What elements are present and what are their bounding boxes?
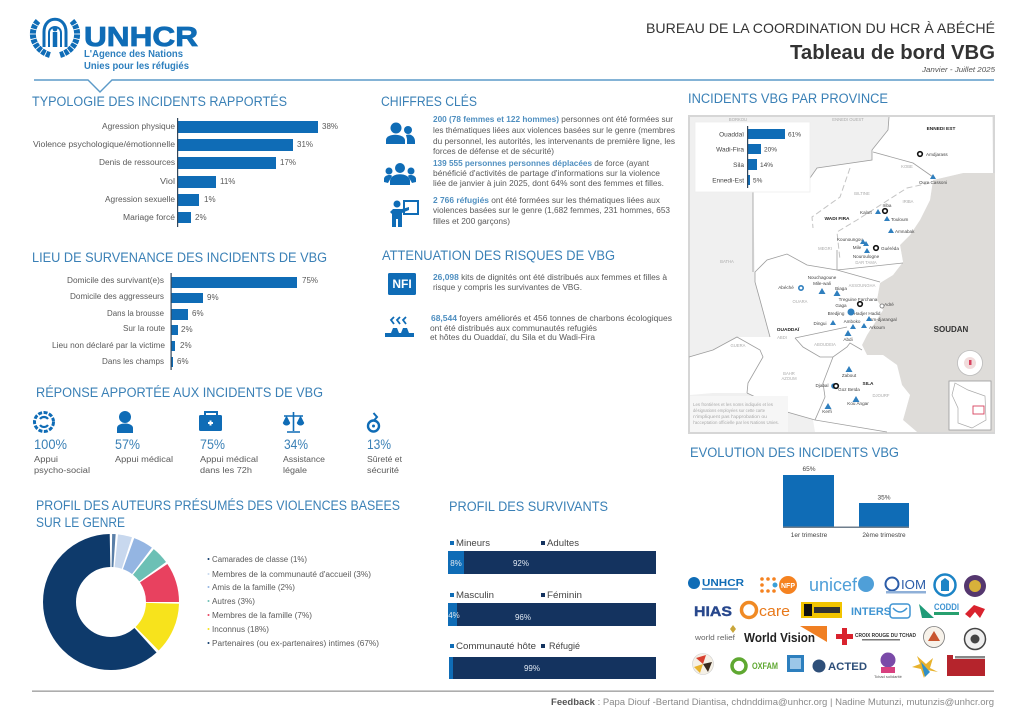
donut legend: Camarades de classe (1%) xyxy=(212,555,307,564)
map labels xyxy=(720,117,969,414)
logo tagline line 2: Unies pour les réfugiés xyxy=(84,61,189,72)
column chart: 35% xyxy=(877,494,891,502)
logo wordmark: UNHCR xyxy=(84,21,198,52)
donut legend xyxy=(208,555,379,648)
map note xyxy=(690,396,788,432)
map labels: Zabout xyxy=(842,373,857,378)
bar chart: Lieu non déclaré par la victime xyxy=(52,341,166,350)
icon: safety xyxy=(368,413,379,432)
logo row 2: HIAS xyxy=(694,603,732,619)
text: formations xyxy=(433,115,675,156)
heading: EVOLUTION DES INCIDENTS VBG xyxy=(690,445,899,460)
map labels: ENNEDI EST xyxy=(927,126,955,132)
bar chart: 17% xyxy=(280,158,296,167)
item: appui medical xyxy=(115,411,173,464)
map note: désignations employées sur cette carte xyxy=(693,408,766,413)
text: foyers ameliores: et hôtes du Ouaddaï, du Sila et du Wadi-Fira xyxy=(430,333,596,342)
logo row 1: unicef xyxy=(809,575,858,595)
stacked bar: sexe: 4% xyxy=(448,611,460,620)
stacked bar: statut: Réfugié xyxy=(549,641,580,651)
icon: psycho-social ring xyxy=(34,412,54,432)
panel: chiffres cles xyxy=(381,94,675,227)
text: kits de dignite xyxy=(433,273,668,292)
item: surete et securite: 13% xyxy=(367,436,391,452)
map labels: BILTINE xyxy=(854,191,870,196)
logo row 2: care xyxy=(759,603,790,620)
panel: reponse apportee xyxy=(34,385,403,475)
panel: evolution des incidents xyxy=(690,445,909,539)
logo row 4 xyxy=(692,652,985,679)
logo row 3: CROIX ROUGE DU TCHAD xyxy=(855,633,916,639)
panel: lieu de survenance xyxy=(32,250,327,370)
province bar inset: Sila xyxy=(733,162,744,169)
bar chart: 6% xyxy=(177,357,189,366)
stacked bar: age xyxy=(448,538,656,574)
heading: LIEU DE SURVENANCE DES INCIDENTS DE VBG xyxy=(32,250,327,265)
header rule with notch xyxy=(34,80,994,92)
map labels: Kerfi xyxy=(822,409,832,414)
logo row 4: Tchad solidarité xyxy=(874,674,903,679)
donut legend: Autres (3%) xyxy=(212,597,255,606)
stacked bar: sexe: Masculin xyxy=(456,590,494,600)
column chart: 65% xyxy=(802,466,816,473)
text: foyers ameliores: 68,544 foyers améliorés et 456 tonnes de charbons écologiques xyxy=(431,314,672,323)
map labels: BATHA xyxy=(720,259,734,264)
map markers: camps xyxy=(818,174,936,409)
province bar inset: 61% xyxy=(788,132,801,138)
map labels: Gaga xyxy=(835,303,847,308)
map labels: KOBE xyxy=(901,164,913,169)
map labels: Am-djarangal xyxy=(869,317,897,322)
logo row 1: NFP xyxy=(781,583,795,590)
heading: ATTENUATION DES RISQUES DE VBG xyxy=(382,248,615,263)
province bar inset xyxy=(695,122,810,192)
icon: wreath emblem xyxy=(33,19,77,55)
map labels: BORKOU xyxy=(729,117,747,122)
panel: incidents par province xyxy=(688,91,995,433)
text: formations: 200 (78 femmes et 122 hommes) personnes ont été formées sur xyxy=(433,115,673,124)
logo row 1: UNHCR xyxy=(702,578,745,589)
text: personnes deplacees xyxy=(433,159,664,188)
office name: BUREAU DE LA COORDINATION DU HCR À ABÉCHÉ xyxy=(646,20,995,36)
heading: RÉPONSE APPORTÉE AUX INCIDENTS DE VBG xyxy=(36,385,323,400)
item: surete et securite: Sûreté et xyxy=(367,455,403,464)
bar chart xyxy=(33,118,338,227)
bar chart: Agression sexuelle xyxy=(105,195,176,204)
item: appui medical 72h xyxy=(199,412,258,475)
province bar inset: 5% xyxy=(753,178,763,184)
heading: PROFIL DES SURVIVANTS xyxy=(449,499,608,514)
map labels: Hadjer Hadid xyxy=(854,311,881,316)
donut legend: Membres de la communauté d'accueil (3%) xyxy=(212,570,371,579)
donut chart xyxy=(60,550,162,654)
stacked bar: age: 8% xyxy=(450,559,462,568)
map labels: ASSOUNGHA xyxy=(849,283,876,288)
map labels: Kou Angar xyxy=(847,401,869,406)
bar chart: 1% xyxy=(204,195,216,204)
map labels: Adré xyxy=(884,302,894,307)
map note: Les frontières et les noms indiqués et les xyxy=(693,402,773,407)
map labels: Abéché xyxy=(778,285,794,290)
partner logos xyxy=(688,574,986,679)
map labels: AZOUM xyxy=(781,376,797,381)
icon: presenter xyxy=(390,200,418,227)
bar chart: Denis de ressources xyxy=(99,158,175,167)
item: appui medical 72h: Appui médical xyxy=(200,455,258,464)
stacked bar: sexe: Féminin xyxy=(547,590,582,600)
map labels: Bredjing xyxy=(828,311,845,316)
icon: NFI box xyxy=(388,273,416,295)
date: Janvier - Juillet 2025 xyxy=(921,67,995,74)
text: refugies formes: violences basées sur le genre (1,682 femmes, 231 hommes, 653 xyxy=(433,206,671,215)
text: personnes deplacees: bénéficié d'activités de partage d'informations sur la violence xyxy=(433,169,661,178)
bar chart xyxy=(52,273,318,370)
map labels: WADI FIRA xyxy=(824,216,850,222)
stacked bar: age: Mineurs xyxy=(456,538,491,548)
bar chart: Domicile des aggresseurs xyxy=(70,292,164,301)
map note: l'acceptation officielle par les Nations Unies. xyxy=(693,420,779,425)
map labels: Amboko xyxy=(844,319,861,324)
logo row 2: INTERS xyxy=(851,606,891,618)
map labels: Guéréda xyxy=(881,246,899,251)
stacked bar: statut: 99% xyxy=(524,664,540,673)
text: formations: du personnel, les autorités, les intervenants de première ligne, les xyxy=(433,137,675,146)
bar chart: 2% xyxy=(180,341,192,350)
map labels: Mile xyxy=(853,245,862,250)
map labels: Arkoum xyxy=(869,325,885,330)
icon: scales xyxy=(283,412,304,432)
map labels: Kalaït xyxy=(860,210,872,215)
map labels: IRIBA xyxy=(903,199,914,204)
map labels: ENNEDI OUEST xyxy=(832,117,864,122)
logo row 1: IOM xyxy=(901,577,926,592)
stacked bar: age: Adultes xyxy=(547,538,580,548)
map labels: Dingui xyxy=(813,321,827,326)
map labels: Amnabak xyxy=(895,229,915,234)
map labels: ABDI xyxy=(777,335,787,340)
logo row 4: ACTED xyxy=(828,661,867,673)
province bar inset: 14% xyxy=(760,162,773,169)
heading xyxy=(36,498,400,530)
map labels: Nouroulogne xyxy=(853,254,880,259)
text: personnes deplacees: liée de janvier à juin 2025, dont 64% sont des femmes et filles. xyxy=(433,179,664,188)
map labels: Iriba xyxy=(883,203,892,208)
item: surete et securite xyxy=(367,413,403,475)
footer rule xyxy=(32,690,994,692)
stacked bar: statut: Communauté hôte xyxy=(456,641,536,651)
stacked bar: sexe xyxy=(448,590,656,626)
bar chart: 38% xyxy=(322,122,338,131)
bar chart: Agression physique xyxy=(102,122,176,131)
item: appui psycho-social: Appui xyxy=(34,455,58,464)
map labels: DAR TAMA xyxy=(855,260,877,265)
province bar inset: Ouaddaï xyxy=(719,132,744,138)
column chart: 2ème trimestre xyxy=(862,532,906,539)
map labels: ABOUDEIA xyxy=(814,342,836,347)
text: refugies formes xyxy=(433,196,671,226)
item: assistance legale xyxy=(283,412,326,475)
map labels: Amdjarass xyxy=(926,152,948,157)
map labels: OUARA xyxy=(793,299,808,304)
item: appui medical 72h: 75% xyxy=(200,436,225,452)
map labels: OUADDAÏ xyxy=(777,326,800,333)
column chart xyxy=(783,466,909,539)
icon: doctor xyxy=(117,411,133,433)
item: assistance legale: Assistance xyxy=(283,455,326,464)
item: surete et securite: sécurité xyxy=(367,466,400,475)
UNHCR logo xyxy=(33,19,198,72)
bar chart: Dans les champs xyxy=(102,357,164,366)
footer feedback: Feedback : Papa Diouf -Bertand Diantisa, chdnddima@unhcr.org | Nadine Mutunzi, mutunzis@unhcr.org xyxy=(551,697,994,707)
icon: group of people xyxy=(384,163,416,185)
map labels: Goz Beïda xyxy=(838,387,860,392)
item: appui psycho-social: psycho-social xyxy=(34,466,90,475)
map markers: offices xyxy=(799,152,922,388)
compass locator xyxy=(958,350,982,376)
logo row 3: World Vision xyxy=(744,631,815,645)
item: appui medical: 57% xyxy=(115,436,140,452)
map labels: Oure Cassoni xyxy=(919,180,947,185)
panel: profil des auteurs xyxy=(36,498,400,654)
bar chart: 11% xyxy=(220,177,235,186)
map labels: Touloum xyxy=(891,217,909,222)
heading: CHIFFRES CLÉS xyxy=(381,94,477,109)
text: kits de dignite: 26,098 kits de dignités ont été distribués aux femmes et filles à xyxy=(433,273,668,282)
logo tagline line 1: L'Agence des Nations xyxy=(84,49,183,60)
donut legend: Inconnus (18%) xyxy=(212,625,269,634)
bar chart: Mariage forcé xyxy=(123,213,176,222)
map labels: SILA xyxy=(863,381,874,387)
text: foyers ameliores: ont été distribués aux communautés refugiés xyxy=(430,324,597,333)
logo row 1 xyxy=(688,574,986,597)
donut legend: Membres de la famille (7%) xyxy=(212,611,312,620)
main title: Tableau de bord VBG xyxy=(790,42,995,64)
bar chart: 75% xyxy=(302,276,318,285)
bar chart: Sur la route xyxy=(123,324,166,333)
map labels: GUERA xyxy=(731,343,746,348)
item: appui psycho-social: 100% xyxy=(34,436,67,452)
map labels: Mile-wali xyxy=(813,281,831,286)
map labels: Treguine Farchana xyxy=(839,297,878,302)
stacked bar: sexe: 96% xyxy=(515,613,531,622)
bar chart: Domicile des survivant(e)s xyxy=(67,276,164,285)
item: appui psycho-social xyxy=(34,412,90,475)
map labels: DJOURF xyxy=(873,393,890,398)
map labels: Abdi xyxy=(843,337,853,342)
item: appui medical 72h: dans les 72h xyxy=(200,466,252,475)
logo row 2 xyxy=(694,602,985,620)
header titles xyxy=(646,20,995,74)
column chart: 1er trimestre xyxy=(791,532,828,539)
map labels: MEGRI xyxy=(818,246,832,251)
heading: PROFIL DES AUTEURS PRÉSUMÉS DES VIOLENCES BASEES xyxy=(36,498,400,513)
text: refugies formes: 2 766 réfugiés ont été formées sur les thématiques liées aux xyxy=(433,196,660,205)
country inset map xyxy=(949,381,991,430)
bar chart: 2% xyxy=(195,213,207,222)
bar chart: 31% xyxy=(297,140,313,149)
map labels: BAHR xyxy=(783,371,795,376)
icon: medical kit xyxy=(199,412,222,431)
text: kits de dignite: risque y compris les survivantes de VBG. xyxy=(433,283,582,292)
province bar inset: Wadi-Fira xyxy=(716,146,744,154)
heading: SUR LE GENRE xyxy=(36,515,125,530)
text: personnes deplacees: 139 555 personnes personnes déplacées de force (ayant xyxy=(433,159,650,168)
heading: TYPOLOGIE DES INCIDENTS RAPPORTÉS xyxy=(32,94,287,109)
map labels: Nouchagoune xyxy=(808,275,837,280)
bar chart: Viol xyxy=(160,177,175,186)
donut legend: Partenaires (ou ex-partenaires) intimes (67%) xyxy=(212,639,379,648)
icon: two people xyxy=(386,122,415,144)
logo row 3 xyxy=(694,625,986,650)
map labels: Biaga xyxy=(835,286,847,291)
text: formations: les thématiques liées aux violences basées sur le genre (membres xyxy=(433,126,675,135)
panel: typologie des incidents xyxy=(32,94,338,227)
panel: profil des survivants xyxy=(448,499,656,679)
panel: attenuation des risques xyxy=(382,248,672,342)
stacked bar: age: 92% xyxy=(513,559,529,568)
logo row 4: OXFAM xyxy=(752,661,778,671)
donut legend: Amis de la famille (2%) xyxy=(212,583,295,592)
icon: NFI box: NFI xyxy=(392,277,412,291)
province bar inset: Ennedi-Est xyxy=(712,178,744,184)
item: appui medical: Appui médical xyxy=(115,455,173,464)
bar chart: 9% xyxy=(207,293,219,302)
logo row 2: CODDI xyxy=(934,602,959,612)
stacked bar: statut xyxy=(449,641,656,679)
province bar inset: 20% xyxy=(764,146,777,154)
item: assistance legale: 34% xyxy=(284,436,308,452)
heading: INCIDENTS VBG PAR PROVINCE xyxy=(688,91,888,106)
map labels: Djabal xyxy=(815,383,829,388)
bar chart: 2% xyxy=(181,325,193,334)
text: refugies formes: filles et 200 garçons) xyxy=(433,217,510,226)
text: foyers ameliores xyxy=(430,314,672,342)
text: formations: forces de défense et de sécurité) xyxy=(433,147,554,156)
map note: n'impliquent pas l'approbation ou xyxy=(693,414,768,419)
map labels: Kounoungou xyxy=(837,237,863,242)
bar chart: Violence psychologique/émotionnelle xyxy=(33,140,176,149)
bar chart: 6% xyxy=(192,309,204,318)
logo row 3: world relief xyxy=(694,635,735,642)
map xyxy=(689,116,995,433)
item: assistance legale: légale xyxy=(283,466,308,475)
icon: cookstove xyxy=(385,317,414,337)
map labels: SOUDAN xyxy=(934,325,969,334)
bar chart: Dans la brousse xyxy=(107,309,165,318)
